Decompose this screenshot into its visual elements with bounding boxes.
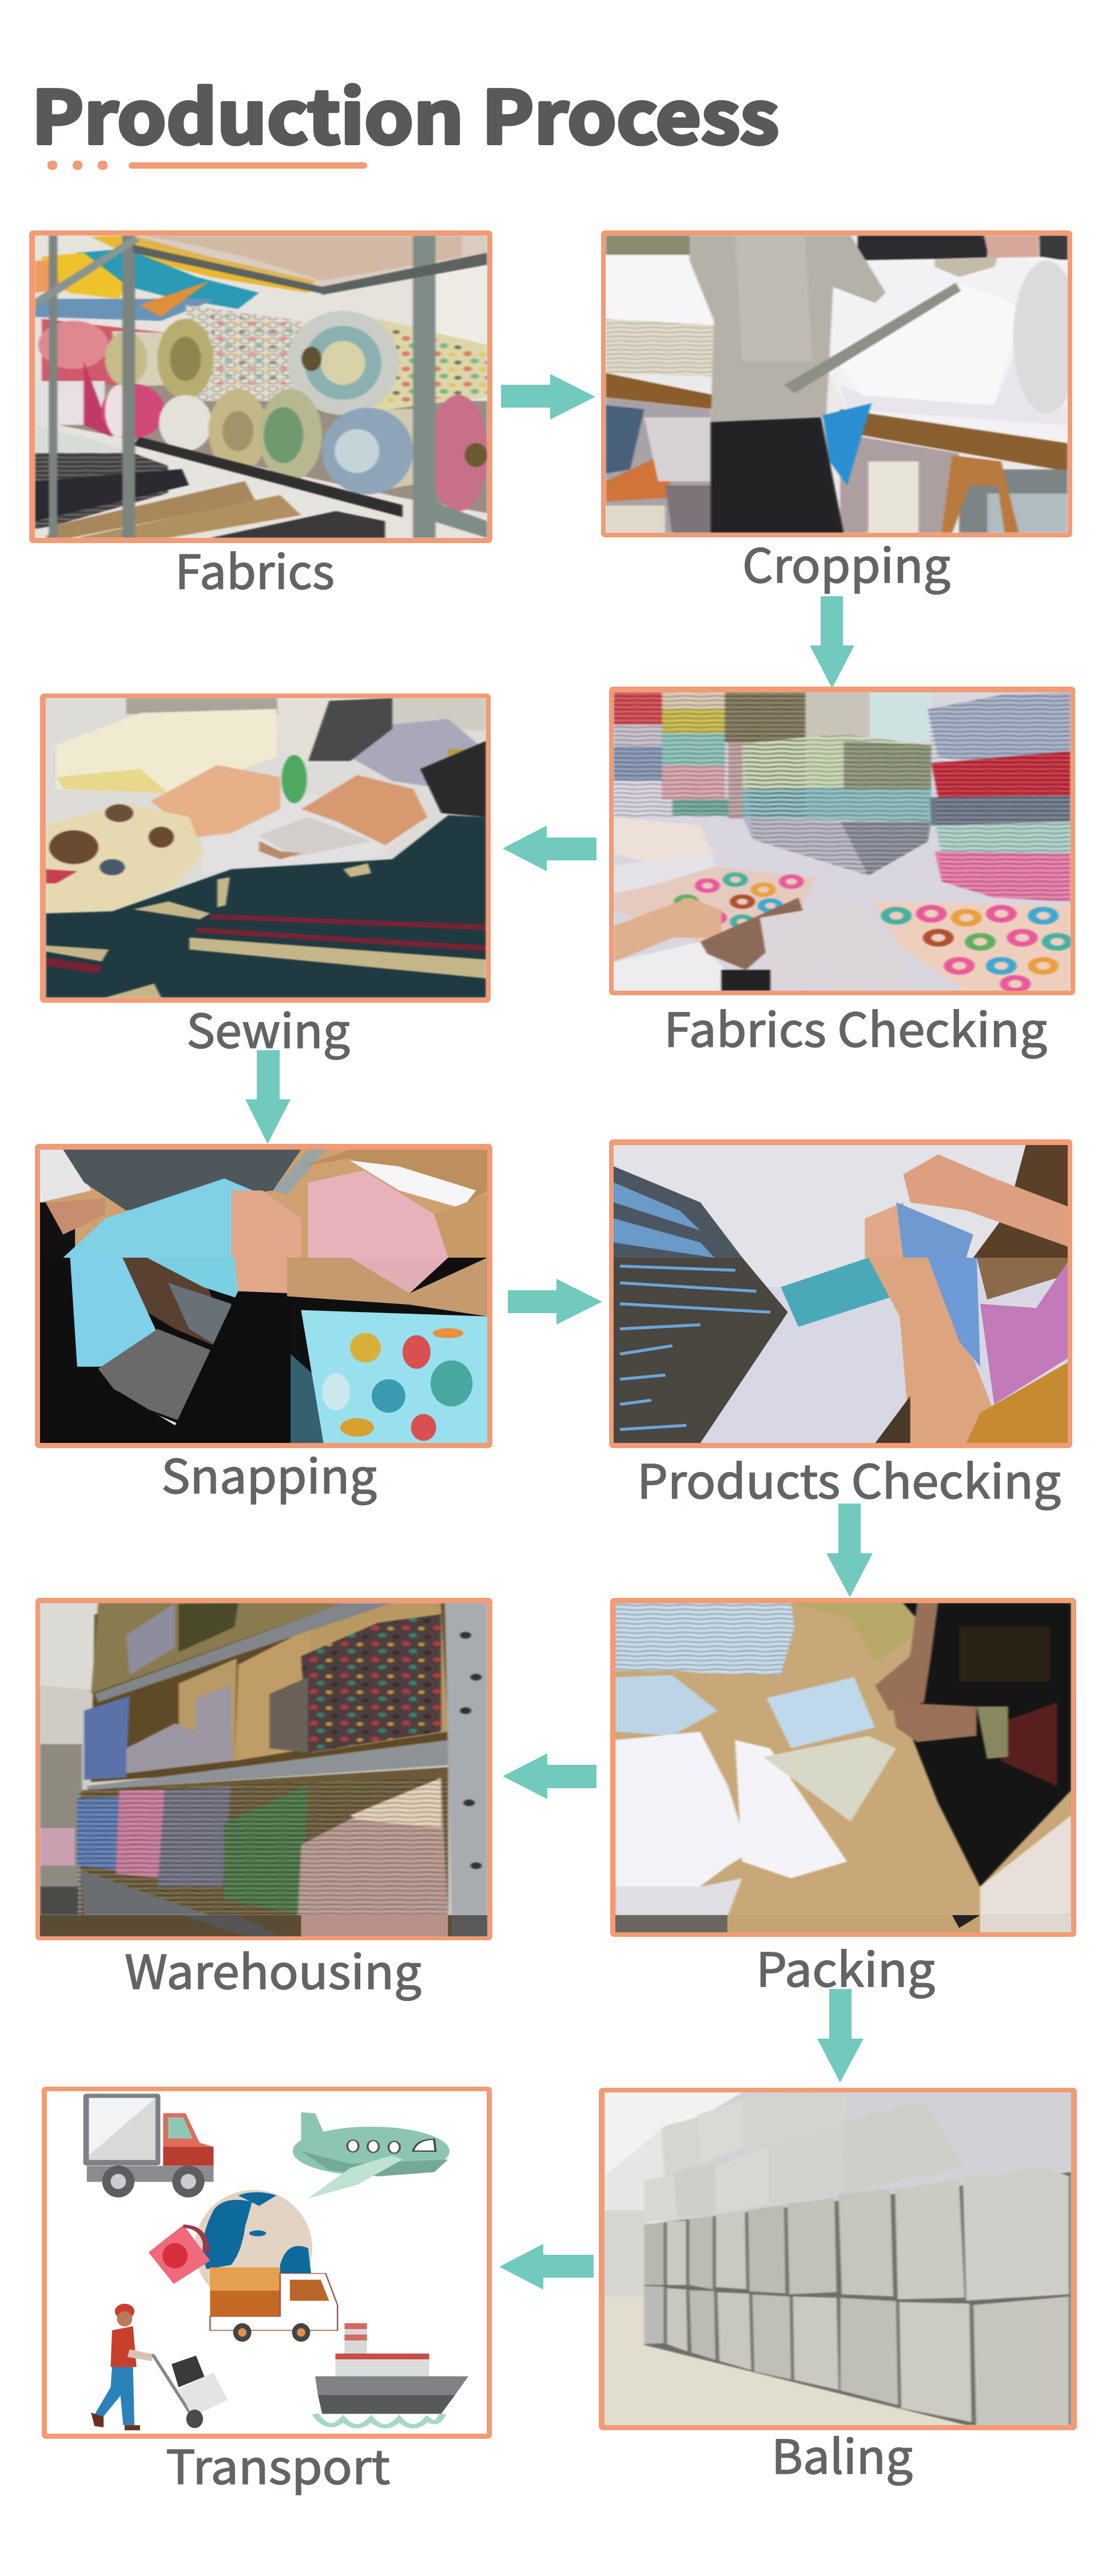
arrow: Snapping to Products Checking <box>508 1279 602 1325</box>
label: Products Checking: Products Checking <box>637 1444 1061 1512</box>
title underline ornament <box>47 161 367 170</box>
arrow: Sewing to Snapping <box>245 1050 291 1144</box>
label: Cropping: Cropping <box>742 528 950 596</box>
label: Snapping: Snapping <box>161 1439 377 1507</box>
icon: cargo ship <box>315 2323 468 2426</box>
panel: Fabrics Checking photo <box>609 687 1075 995</box>
icon: courier with hand truck <box>91 2304 228 2430</box>
label: Sewing: Sewing <box>186 994 350 1062</box>
label: Fabrics: Fabrics <box>175 535 335 603</box>
icon: gift bag with heart <box>149 2225 210 2284</box>
panel: Warehousing photo <box>35 1598 492 1940</box>
label: Packing: Packing <box>756 1932 935 2000</box>
arrow: Baling to Transport <box>499 2244 594 2290</box>
panel: Transport illustration <box>42 2087 492 2439</box>
icon: globe <box>194 2190 312 2306</box>
panel: Packing photo <box>610 1598 1076 1937</box>
panel: Sewing photo <box>40 693 491 1003</box>
arrow: Products Checking to Packing <box>826 1504 873 1597</box>
panel: Baling photo <box>599 2088 1077 2430</box>
title: Production Process <box>31 59 779 165</box>
icon: delivery van <box>210 2267 337 2342</box>
icon: airplane <box>293 2112 449 2198</box>
label: Fabrics Checking: Fabrics Checking <box>664 992 1047 1060</box>
panel: Products Checking photo <box>609 1139 1072 1448</box>
icon: delivery truck <box>83 2094 213 2198</box>
label: Baling: Baling <box>771 2419 913 2487</box>
panel: Cropping photo <box>601 230 1080 537</box>
panel: Fabrics photo <box>29 230 492 543</box>
label: Transport: Transport <box>166 2430 390 2498</box>
arrow: Fabrics Checking to Sewing <box>503 826 596 871</box>
label: Warehousing: Warehousing <box>125 1935 421 2003</box>
arrow: Packing to Baling <box>817 1989 864 2083</box>
panel: Snapping photo <box>35 1144 492 1448</box>
arrow: Packing to Warehousing <box>503 1753 596 1799</box>
arrow: Fabrics to Cropping <box>501 374 595 420</box>
arrow: Cropping to Fabrics Checking <box>810 596 854 688</box>
